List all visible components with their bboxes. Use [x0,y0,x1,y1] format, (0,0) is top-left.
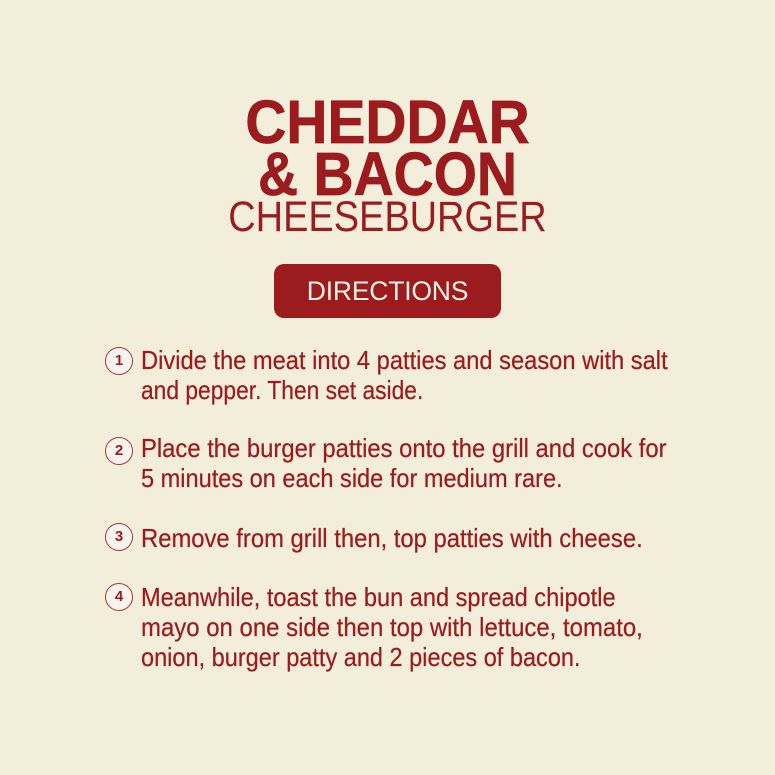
step 2 text: Place the burger patties onto the grill and cook for [141,433,667,463]
step 3 text: Remove from grill then, top patties with cheese. [141,522,643,552]
step 4 [105,582,643,672]
title: & BACON [258,140,517,208]
step 2 text [141,433,667,493]
directions button: DIRECTIONS [307,276,468,306]
step 2 text: 5 minutes on each side for medium rare. [141,463,563,493]
step 4 text: mayo on one side then top with lettuce, tomato, [141,612,643,642]
step 4 text: Meanwhile, toast the bun and spread chipotle [141,582,616,612]
number 4 [105,583,133,611]
step 4 text: onion, burger patty and 2 pieces of bacon. [141,642,581,672]
title: CHEESEBURGER [228,194,547,241]
step 1 text: Divide the meat into 4 patties and season with salt [141,345,668,375]
number 2 [105,436,133,464]
number 3: 3 [115,528,123,545]
step 1 [105,345,668,405]
step 2 [105,433,667,493]
number 2: 2 [115,442,123,458]
number 1 [105,347,133,375]
step 3 [105,522,643,553]
step 1 text [141,345,668,405]
number 1: 1 [115,352,123,369]
title: CHEDDAR [245,88,530,156]
step 4 text [141,582,643,672]
number 4: 4 [115,588,123,605]
step 1 text: and pepper. Then set aside. [141,375,423,405]
title [228,88,547,241]
number 3 [105,523,133,551]
directions button [274,264,501,318]
